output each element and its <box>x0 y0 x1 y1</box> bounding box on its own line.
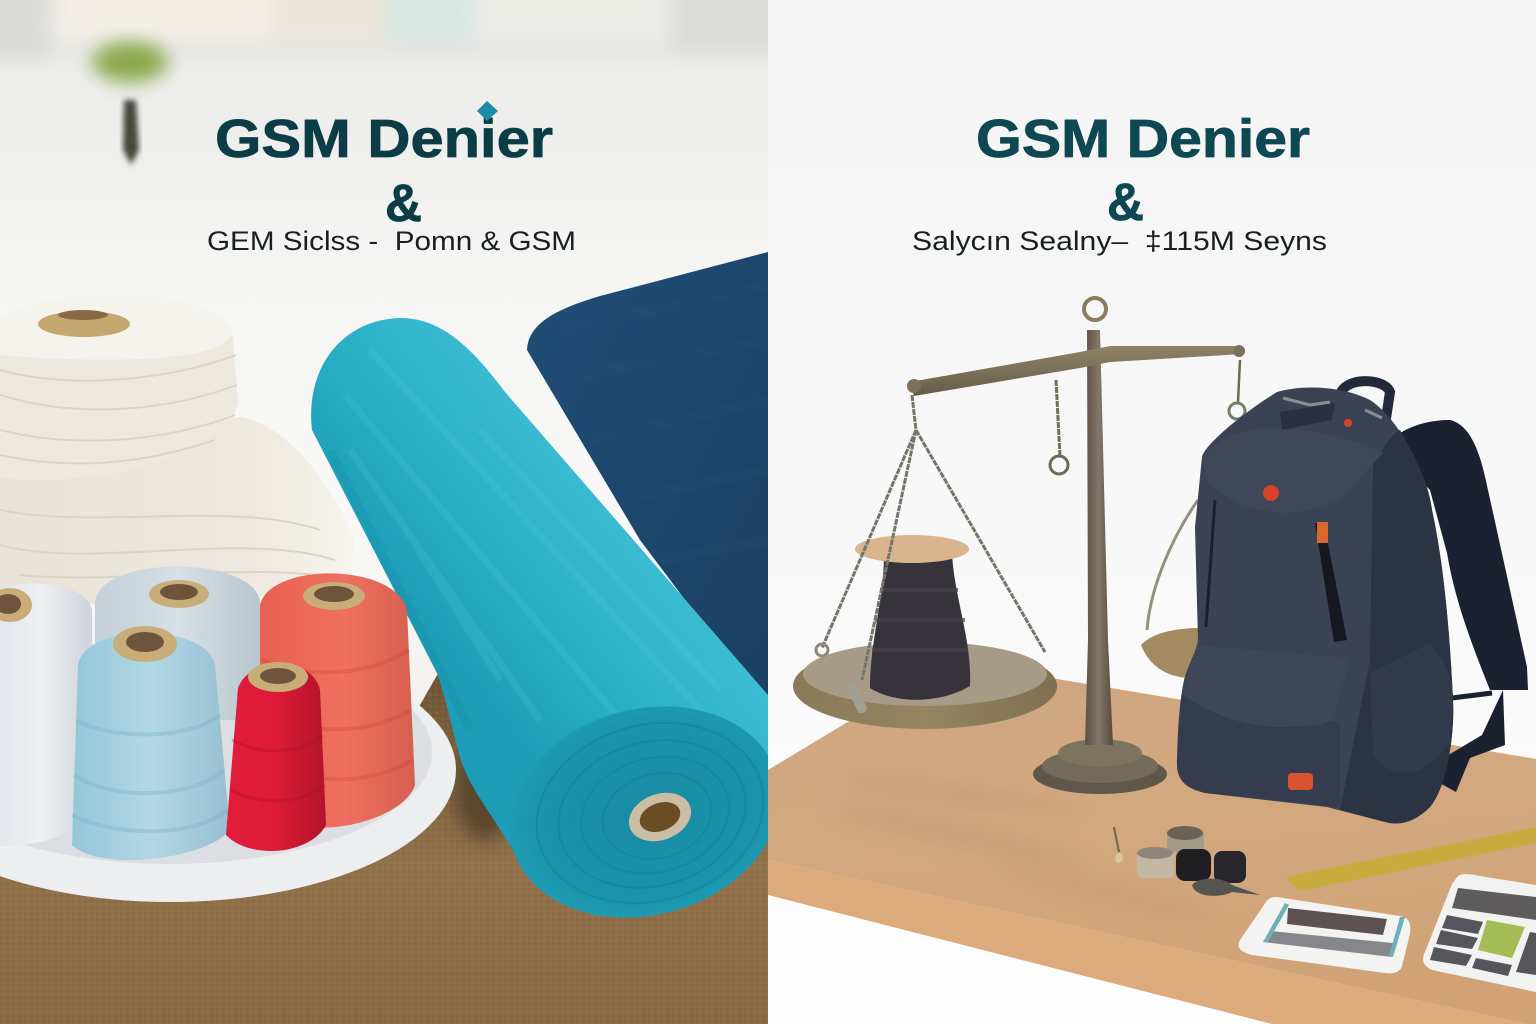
white yarn stack <box>0 294 355 604</box>
yarn core ring <box>38 311 130 337</box>
left slit pocket <box>1206 500 1215 627</box>
side pocket <box>1370 643 1453 773</box>
top handle <box>1340 381 1390 425</box>
teal diamond accent <box>477 101 498 121</box>
wooden table <box>768 661 1536 1024</box>
zipper <box>1315 522 1347 642</box>
brass ruler <box>1285 827 1536 891</box>
scale beam <box>910 346 1243 396</box>
shoulder strap <box>1401 420 1528 690</box>
heading: right panel <box>912 109 1327 256</box>
right subtitle: Salycın Sealny– ‡115M Seyns <box>912 226 1327 256</box>
blurred plant <box>92 42 168 165</box>
side panel <box>1340 430 1453 823</box>
teal fabric roll <box>311 318 768 918</box>
balance scale <box>793 298 1245 794</box>
spool: light blue <box>72 626 230 860</box>
lower yarn skein <box>0 417 355 604</box>
left pan chains <box>822 395 1045 680</box>
left ampersand: & <box>385 174 422 233</box>
handle strap <box>1280 403 1335 430</box>
left subtitle: GEM Siclss - Pomn & GSM <box>207 226 576 256</box>
orange tag <box>1288 773 1313 790</box>
top ring <box>1084 298 1106 320</box>
heading: left panel <box>207 101 576 256</box>
metal top clips <box>1283 398 1382 418</box>
backpack lid flap <box>1375 452 1383 462</box>
navy fabric roll <box>527 252 768 710</box>
thread spool on pan <box>870 555 970 700</box>
panel: scale and backpack photo <box>768 296 1536 1024</box>
right pan <box>1238 360 1240 402</box>
backpack <box>1177 381 1528 823</box>
white digital scale <box>1238 897 1410 973</box>
panel: fabric and yarn photo <box>0 0 804 1024</box>
backpack body <box>1177 387 1453 823</box>
white calculator <box>1423 874 1536 992</box>
left pan <box>793 668 1057 729</box>
blurred window background <box>0 0 790 60</box>
spool: coral <box>260 573 415 828</box>
spool: white <box>0 584 92 846</box>
roll core <box>628 792 692 842</box>
upper yarn cake <box>0 332 238 440</box>
lower strap webbing <box>1442 690 1505 792</box>
small metal weights <box>1114 826 1260 896</box>
hanging chain <box>1056 380 1060 456</box>
right ampersand: & <box>1107 173 1144 232</box>
scale base <box>1033 764 1167 794</box>
spool: grey blue <box>95 566 260 720</box>
spool: red <box>226 662 326 851</box>
scale post <box>1085 330 1113 745</box>
white serving tray <box>0 638 456 902</box>
left title: GSM Denier <box>215 109 553 169</box>
red button <box>1263 485 1279 501</box>
roll end face <box>514 706 768 918</box>
front pocket <box>1177 693 1340 807</box>
right title: GSM Denier <box>976 109 1310 169</box>
brown burlap surface <box>0 670 768 1024</box>
